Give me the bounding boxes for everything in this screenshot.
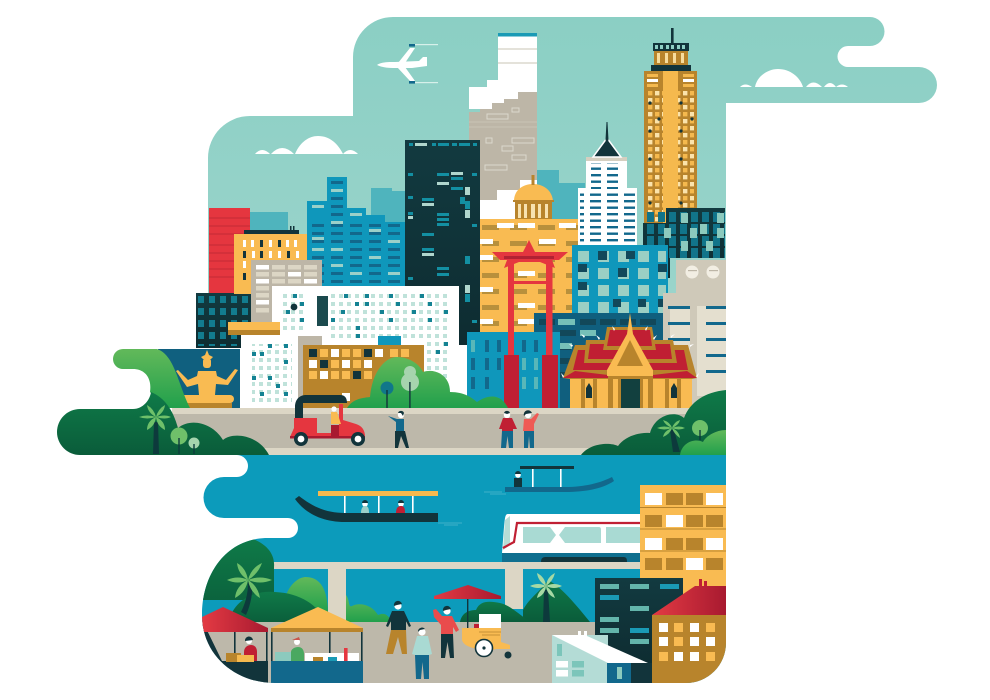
left foliage dark green	[57, 392, 269, 455]
tan window block	[298, 336, 424, 408]
round trees left	[170, 428, 200, 454]
yellow ledge	[228, 322, 280, 335]
large boat	[295, 491, 462, 525]
sky train	[502, 514, 640, 562]
shopper: pale top blue pants	[412, 628, 432, 679]
grey right building	[663, 260, 726, 405]
river and lower section	[195, 455, 730, 685]
white pointed tower	[578, 122, 637, 245]
red building	[209, 208, 250, 298]
right foliage	[581, 390, 726, 455]
road	[172, 408, 692, 455]
dark building right	[643, 208, 725, 278]
blue front building	[467, 332, 560, 408]
palm tree bottom left	[227, 563, 272, 615]
cloud: upper right	[740, 69, 848, 87]
tuk-tuk	[290, 395, 365, 446]
dark office building	[595, 578, 683, 668]
airplane	[377, 44, 438, 84]
food cart with umbrella	[434, 585, 512, 658]
red-roof brick house	[652, 579, 726, 685]
tall grey and white skyscraper	[469, 33, 537, 200]
dark blue low building	[534, 313, 663, 408]
white building behind dome	[480, 180, 537, 220]
back teal buildings	[250, 170, 585, 234]
elevated rail bridge	[274, 562, 640, 620]
vendor: dark top brown pants	[386, 601, 411, 654]
hills under bridge	[202, 539, 590, 625]
temple	[561, 313, 699, 408]
market ground	[202, 622, 600, 683]
yellow apartment block	[640, 485, 726, 605]
giant swing	[492, 240, 568, 408]
buddha panel	[158, 349, 240, 408]
palm tree right	[657, 420, 685, 452]
pedestrian: coral top	[523, 410, 539, 448]
shopper: red top dark pants	[433, 606, 459, 658]
white-roof house	[552, 631, 652, 683]
red market stall	[202, 607, 268, 683]
gold tower	[644, 28, 697, 226]
trees behind road	[347, 357, 508, 408]
small boat	[484, 466, 614, 494]
yellow market stall	[271, 607, 363, 683]
sky background	[208, 17, 937, 300]
buddha statue	[176, 350, 238, 408]
blue stepped building	[307, 177, 405, 296]
white dotted building	[241, 286, 459, 408]
grey building left	[251, 260, 322, 330]
dome	[513, 175, 554, 219]
blue window building centre	[572, 245, 668, 317]
dark tower with lit windows	[405, 140, 480, 345]
yellow building left	[234, 226, 307, 294]
pedestrian: red top	[499, 411, 517, 448]
yellow domed building	[480, 175, 580, 334]
palm tree bottom right	[530, 573, 562, 622]
palm tree left	[139, 405, 171, 454]
cloud: left	[255, 136, 358, 154]
pedestrian: blue top	[388, 411, 409, 448]
small dark building left	[196, 293, 251, 348]
left foliage light green	[113, 349, 190, 408]
